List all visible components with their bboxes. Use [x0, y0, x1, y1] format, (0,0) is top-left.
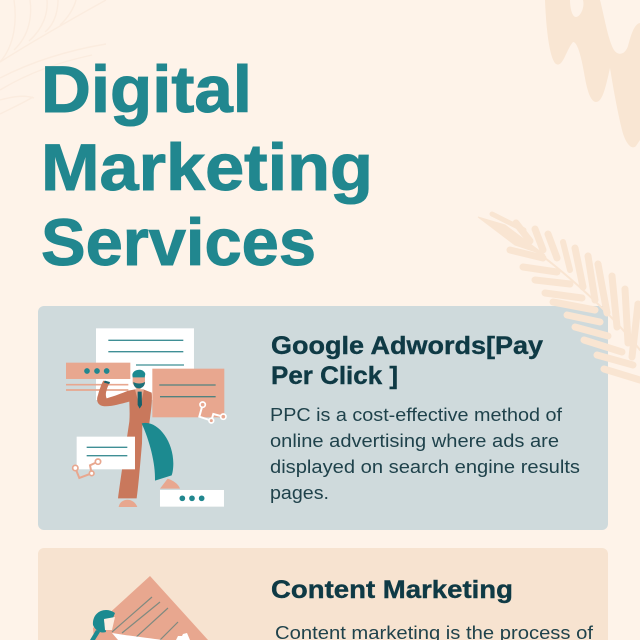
panel: Content Marketing background — [38, 548, 608, 640]
illustration: woman with tilted document — [90, 576, 208, 640]
title: Marketing — [41, 130, 373, 204]
card: small white — [73, 437, 135, 478]
heading: Google Adwords: Google Adwords[Pay — [271, 332, 543, 360]
text: Google Adwords description: PPC is a cost-effective method of — [270, 405, 563, 425]
heading: Content Marketing: Content Marketing — [271, 576, 513, 604]
figure: man — [97, 370, 180, 507]
card: white with dots — [160, 490, 224, 507]
decoration: top-left palm leaf outline — [0, 0, 106, 114]
card: large white — [96, 328, 194, 400]
decoration: right palm leaf — [478, 214, 640, 380]
card: salmon with chart line — [152, 369, 226, 423]
illustration: man with floating content cards — [66, 328, 226, 507]
title: Services — [41, 205, 316, 279]
text: Google Adwords description — [270, 405, 580, 503]
title — [41, 52, 373, 279]
decoration: top-right abstract drips — [545, 0, 640, 147]
title: Digital — [41, 52, 252, 126]
panel: Google Adwords background — [38, 306, 608, 530]
card: salmon with dots — [66, 363, 130, 390]
text: Google Adwords description: pages. — [270, 483, 329, 503]
text: Google Adwords description: online advertising where ads are — [270, 431, 559, 451]
heading: Google Adwords: Per Click ] — [271, 362, 398, 390]
text: Google Adwords description: displayed on search engine results — [270, 457, 580, 477]
heading: Google Adwords — [271, 332, 543, 390]
